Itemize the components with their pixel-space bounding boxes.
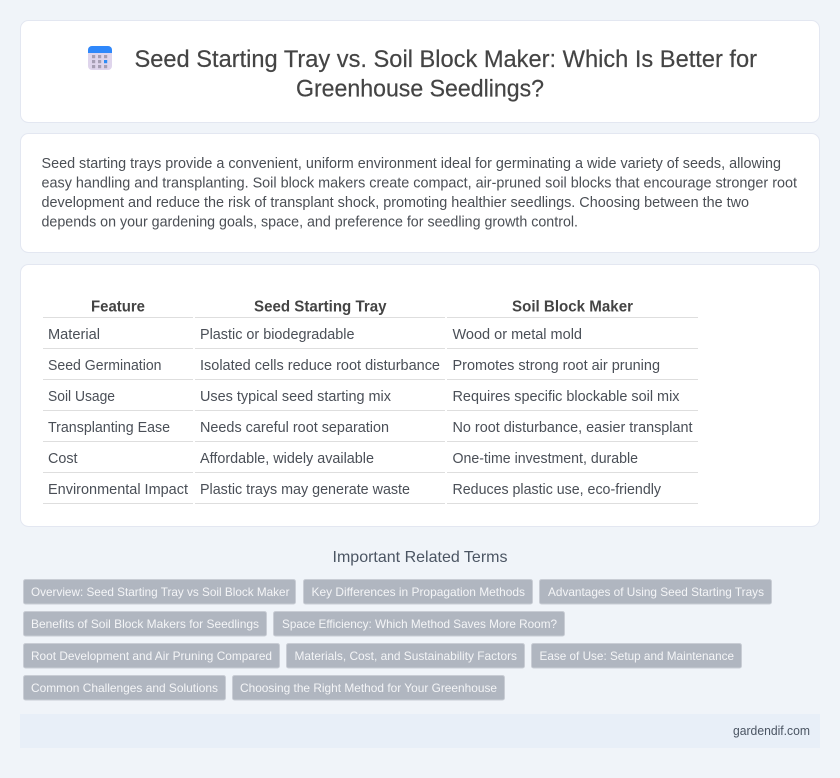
related terms tags bbox=[24, 580, 772, 700]
panel: title card bbox=[20, 20, 820, 122]
tag bbox=[540, 580, 772, 604]
tag: Common Challenges and Solutions bbox=[31, 681, 218, 695]
table header row bbox=[43, 298, 698, 318]
tag: Space Efficiency: Which Method Saves More Room? bbox=[282, 617, 557, 631]
table header row: Feature bbox=[91, 298, 145, 316]
tag: Benefits of Soil Block Makers for Seedlings bbox=[31, 617, 259, 631]
tag: Choosing the Right Method for Your Greenhouse bbox=[240, 681, 497, 695]
intro paragraph: development and reduce the risk of transplant shock, promoting healthier seedlings. Choosing between the two bbox=[42, 195, 749, 211]
table row: transplanting ease: No root disturbance, easier transplant bbox=[452, 420, 692, 436]
tag bbox=[286, 644, 524, 668]
table row: environmental impact bbox=[43, 482, 698, 504]
table row: cost: Cost bbox=[48, 451, 78, 467]
title: Seed Starting Tray vs. Soil Block Maker: Which Is Better for bbox=[134, 46, 757, 73]
table row: seed germination: Promotes strong root air pruning bbox=[452, 358, 660, 374]
table row: soil usage: Soil Usage bbox=[48, 389, 115, 405]
footer bar bbox=[20, 714, 820, 748]
tag: Root Development and Air Pruning Compared bbox=[31, 649, 272, 663]
tag bbox=[532, 644, 742, 668]
footer bar: gardendif.com bbox=[733, 724, 810, 738]
table row: material: Wood or metal mold bbox=[452, 327, 582, 343]
table row: material bbox=[43, 327, 698, 349]
tag bbox=[274, 612, 564, 636]
panel: comparison table bbox=[20, 264, 820, 526]
table row: environmental impact: Reduces plastic use, eco-friendly bbox=[452, 482, 662, 498]
tag bbox=[24, 612, 266, 636]
table row: soil usage: Uses typical seed starting mix bbox=[200, 389, 392, 405]
table row: transplanting ease: Needs careful root separation bbox=[200, 420, 389, 436]
table row: environmental impact: Plastic trays may generate waste bbox=[200, 482, 410, 498]
tag: Ease of Use: Setup and Maintenance bbox=[540, 649, 734, 663]
table row: transplanting ease: Transplanting Ease bbox=[48, 420, 170, 436]
tag bbox=[24, 644, 280, 668]
title: Greenhouse Seedlings? bbox=[296, 76, 544, 102]
table row: cost bbox=[43, 451, 698, 473]
table row: material: Material bbox=[48, 327, 100, 343]
table row: transplanting ease bbox=[43, 420, 698, 442]
table row: environmental impact: Environmental Impact bbox=[48, 482, 188, 498]
tag: Advantages of Using Seed Starting Trays bbox=[548, 585, 764, 599]
tag bbox=[24, 580, 296, 604]
tag: Overview: Seed Starting Tray vs Soil Block Maker bbox=[31, 585, 290, 599]
heading: important related terms: Important Related Terms bbox=[332, 549, 508, 566]
intro paragraph: easy handling and transplanting. Soil block makers create compact, air-pruned soil blocks that encourage stronger root bbox=[42, 176, 797, 192]
table row: cost: Affordable, widely available bbox=[200, 451, 374, 467]
table row: soil usage: Requires specific blockable soil mix bbox=[452, 389, 680, 405]
table header row: Seed Starting Tray bbox=[254, 298, 387, 316]
table row: seed germination: Seed Germination bbox=[48, 358, 162, 374]
intro paragraph: Seed starting trays provide a convenient, uniform environment ideal for germinating a wide variety of seeds, allowing bbox=[42, 156, 781, 172]
intro paragraph bbox=[42, 156, 797, 230]
tag: Key Differences in Propagation Methods bbox=[312, 585, 525, 599]
tag bbox=[232, 676, 504, 700]
table row: seed germination bbox=[43, 358, 698, 380]
table row: seed germination: Isolated cells reduce root disturbance bbox=[200, 358, 440, 374]
tag: Materials, Cost, and Sustainability Factors bbox=[294, 649, 517, 663]
title bbox=[134, 46, 757, 102]
tag bbox=[304, 580, 532, 604]
table row: cost: One-time investment, durable bbox=[452, 451, 638, 467]
table header row: Soil Block Maker bbox=[512, 298, 633, 316]
tag bbox=[24, 676, 226, 700]
table row: soil usage bbox=[43, 389, 698, 411]
table row: material: Plastic or biodegradable bbox=[200, 327, 354, 343]
icon: seed tray calendar grid bbox=[88, 46, 112, 70]
panel: introduction bbox=[20, 134, 820, 252]
intro paragraph: depends on your gardening goals, space, and preference for seedling growth control. bbox=[42, 214, 578, 230]
